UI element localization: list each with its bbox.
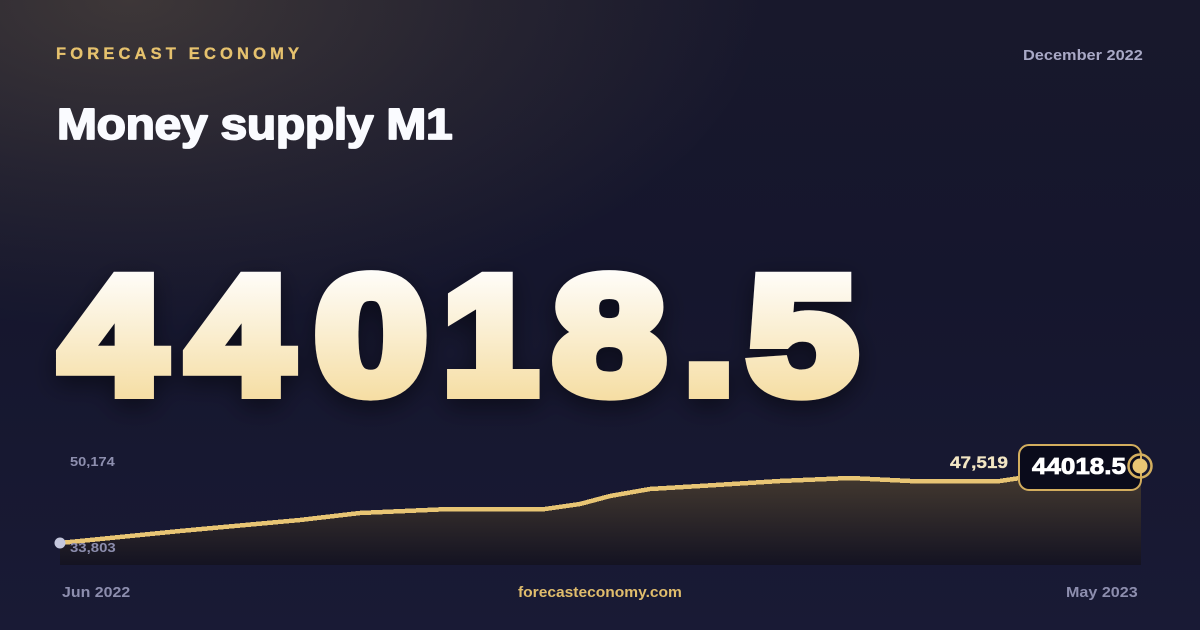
big value: 0 [315, 243, 427, 428]
title: Money supply M1 [57, 99, 453, 149]
end marker [1128, 454, 1152, 478]
chart line [60, 478, 1020, 543]
start date: Jun 2022 [62, 584, 130, 601]
peak label: 47,519 [950, 453, 1008, 472]
value callout [1019, 445, 1141, 490]
axis max label: 50,174 [70, 454, 115, 469]
website: forecasteconomy.com [518, 584, 682, 601]
start dot [54, 538, 66, 548]
big value: . [684, 242, 734, 428]
big value: 1 [443, 242, 538, 428]
brand label: FORECAST ECONOMY [56, 45, 299, 63]
end date: May 2023 [1066, 584, 1138, 601]
big value [60, 242, 857, 429]
big value: 5 [748, 243, 857, 428]
big value: 8 [554, 243, 665, 429]
axis min label: 33,803 [70, 540, 116, 555]
chart area [60, 466, 1141, 565]
value callout: 44018.5 [1032, 454, 1126, 480]
date: December 2022 [1023, 48, 1143, 64]
big value: 4 [60, 243, 165, 428]
big value: 4 [187, 243, 292, 428]
sparkline chart [54, 445, 1152, 565]
